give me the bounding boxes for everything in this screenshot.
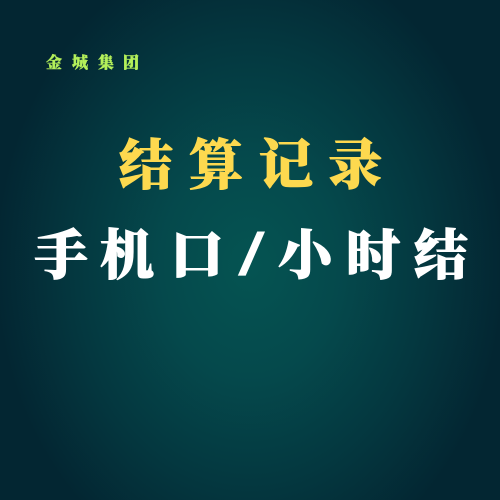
title: settlement records: 结 — [119, 136, 173, 196]
title: settlement records: 算 — [189, 136, 243, 196]
subtitle: per phone line per hour: 结 — [414, 226, 468, 286]
subtitle: per phone line per hour: / — [235, 222, 267, 287]
company name — [46, 54, 139, 72]
company name: 集 — [98, 55, 114, 72]
title: settlement records: 记 — [259, 136, 313, 196]
company name: 金 — [46, 55, 62, 72]
subtitle: per phone line per hour: 口 — [170, 226, 224, 286]
title: settlement records — [119, 136, 382, 196]
subtitle: per phone line per hour: 时 — [346, 226, 400, 286]
subtitle: per phone line per hour — [34, 222, 468, 287]
subtitle: per phone line per hour: 手 — [34, 226, 88, 286]
title: settlement records: 录 — [328, 136, 382, 196]
company name: 城 — [72, 55, 88, 72]
subtitle: per phone line per hour: 小 — [278, 226, 332, 286]
company name: 团 — [123, 55, 139, 72]
subtitle: per phone line per hour: 机 — [100, 226, 154, 286]
